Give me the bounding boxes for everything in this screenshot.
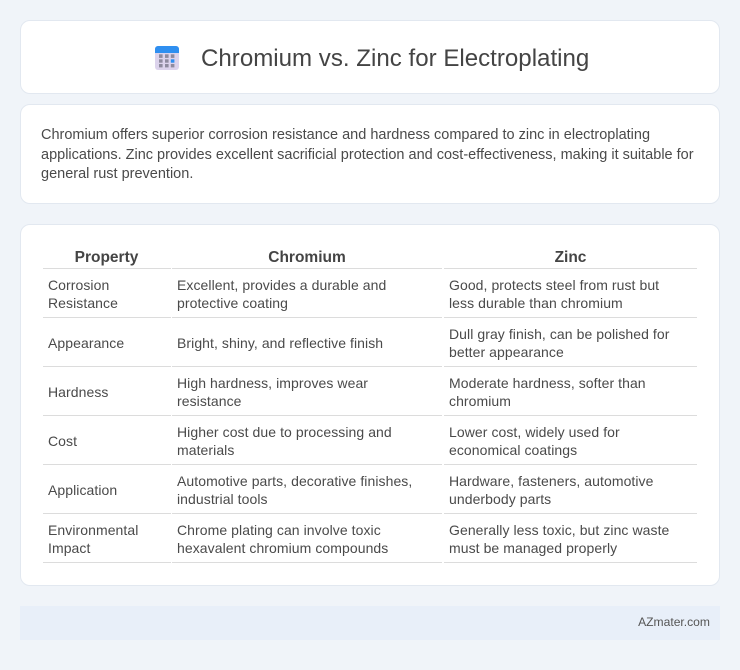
chromium environmental impact: Chrome plating can involve toxic (177, 522, 381, 538)
zinc application: Hardware, fasteners, automotive (449, 473, 654, 489)
footer bar (20, 606, 720, 640)
row: environmental impact (48, 522, 138, 556)
zinc corrosion resistance (449, 277, 659, 311)
row: corrosion resistance (48, 277, 118, 311)
table header: property: Property (75, 249, 138, 266)
row: cost: Cost (48, 433, 77, 449)
zinc cost: Lower cost, widely used for (449, 424, 620, 440)
summary text: Chromium offers superior corrosion resistance and hardness compared to zinc in electroplating (41, 127, 650, 143)
chromium application: industrial tools (177, 491, 268, 507)
zinc cost (449, 424, 620, 458)
zinc hardness: Moderate hardness, softer than (449, 375, 646, 391)
chromium hardness: resistance (177, 393, 242, 409)
chromium cost: materials (177, 442, 234, 458)
zinc hardness (449, 375, 646, 409)
zinc corrosion resistance: Good, protects steel from rust but (449, 277, 659, 293)
row: corrosion resistance: Resistance (48, 295, 118, 311)
row: application: Application (48, 482, 117, 498)
chromium application (177, 473, 412, 507)
table header: zinc: Zinc (555, 249, 586, 266)
zinc appearance: better appearance (449, 344, 564, 360)
chromium environmental impact: hexavalent chromium compounds (177, 540, 388, 556)
summary panel (20, 104, 720, 204)
zinc environmental impact: must be managed properly (449, 540, 617, 556)
row: hardness: Hardness (48, 384, 108, 400)
summary text (41, 127, 694, 182)
zinc environmental impact (449, 522, 669, 556)
row: appearance: Appearance (48, 335, 124, 351)
table header: chromium: Chromium (268, 249, 346, 266)
header panel (20, 20, 720, 94)
row: corrosion resistance: Corrosion (48, 277, 109, 293)
zinc appearance: Dull gray finish, can be polished for (449, 326, 670, 342)
row: environmental impact: Environmental (48, 522, 138, 538)
chromium corrosion resistance (177, 277, 386, 311)
chromium application: Automotive parts, decorative finishes, (177, 473, 412, 489)
zinc environmental impact: Generally less toxic, but zinc waste (449, 522, 669, 538)
title: Chromium vs. Zinc for Electroplating (201, 45, 589, 72)
zinc appearance (449, 326, 670, 360)
comparison table panel (20, 224, 720, 586)
chromium corrosion resistance: Excellent, provides a durable and (177, 277, 386, 293)
zinc corrosion resistance: less durable than chromium (449, 295, 623, 311)
zinc application (449, 473, 654, 507)
chromium hardness: High hardness, improves wear (177, 375, 368, 391)
chromium cost (177, 424, 392, 458)
zinc application: underbody parts (449, 491, 551, 507)
chromium appearance: Bright, shiny, and reflective finish (177, 335, 383, 351)
chromium environmental impact (177, 522, 388, 556)
footer credit: AZmater.com (638, 615, 710, 629)
row: environmental impact: Impact (48, 540, 90, 556)
zinc cost: economical coatings (449, 442, 577, 458)
icon: calendar (155, 46, 179, 70)
summary text: general rust prevention. (41, 166, 193, 182)
zinc hardness: chromium (449, 393, 511, 409)
chromium hardness (177, 375, 368, 409)
chromium corrosion resistance: protective coating (177, 295, 288, 311)
chromium cost: Higher cost due to processing and (177, 424, 392, 440)
summary text: applications. Zinc provides excellent sacrificial protection and cost-effectiveness, making it suitable for (41, 146, 694, 162)
